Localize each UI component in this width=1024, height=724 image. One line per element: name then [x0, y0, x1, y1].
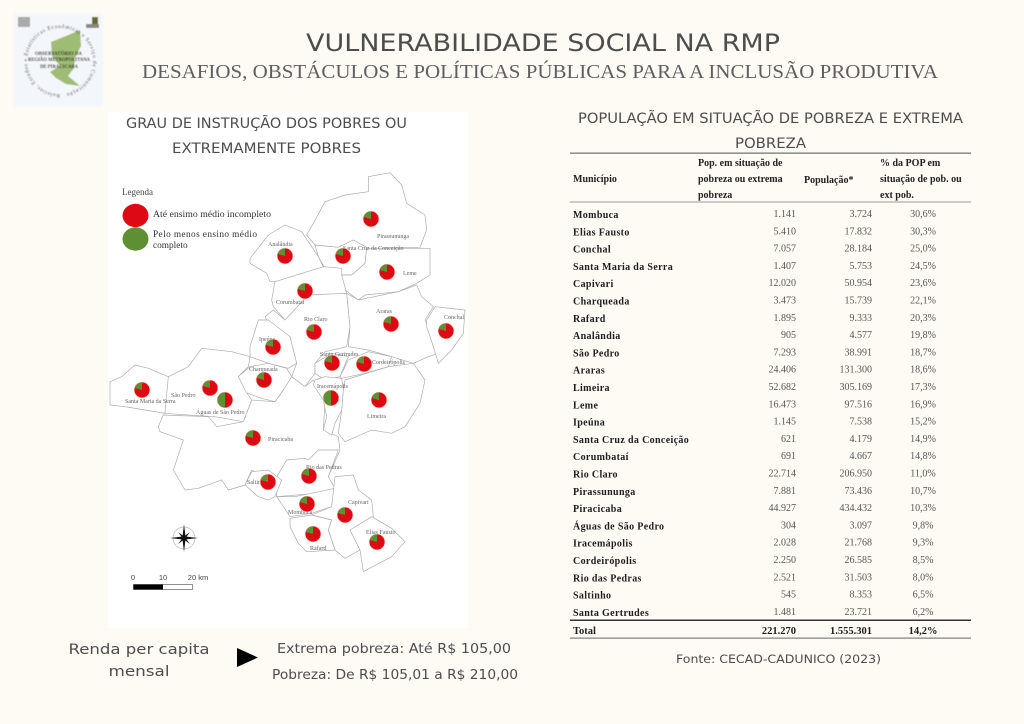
- map labels: Iracemápolis: [317, 384, 349, 390]
- table header: situação de pob. ou: [880, 174, 962, 185]
- title: VULNERABILIDADE SOCIAL NA RMP: [306, 29, 780, 57]
- table rows: 8,5%: [913, 555, 933, 566]
- table rows: 9.333: [850, 313, 872, 324]
- table rows: Mombuca: [573, 210, 619, 221]
- table rows: 20,3%: [910, 313, 936, 324]
- table rows: 304: [781, 520, 796, 531]
- table rows: 19,8%: [910, 330, 936, 341]
- legend: [122, 187, 271, 251]
- table rows: 1.141: [774, 209, 796, 220]
- panel: map of education level: [108, 112, 468, 628]
- arrow: [237, 648, 258, 667]
- source note: Fonte: CECAD-CADUNICO (2023): [676, 652, 881, 666]
- table rows: 14,8%: [910, 451, 936, 462]
- table rows: 16,9%: [910, 399, 936, 410]
- table rows: 22,1%: [910, 296, 936, 306]
- map labels: Rafard: [310, 545, 326, 552]
- table rows: 25,0%: [910, 244, 936, 255]
- logo: REGIÃO METROPOLITANA: [28, 55, 90, 63]
- heading: map: GRAU DE INSTRUÇÃO DOS POBRES OU: [126, 115, 407, 132]
- table total row: 221.270: [762, 626, 796, 637]
- table header: [573, 158, 962, 201]
- table rows: 15,2%: [910, 417, 936, 428]
- table rows: 621: [781, 434, 796, 445]
- scale bar: 20 km: [188, 573, 208, 582]
- table rows: 12.020: [768, 278, 796, 289]
- table rows: Analândia: [573, 331, 621, 342]
- map labels: Elias Fausto: [366, 530, 396, 536]
- table rows: 17.832: [844, 226, 872, 237]
- map labels: Rio das Pedras: [306, 465, 342, 471]
- map labels: Águas de São Pedro: [196, 408, 244, 416]
- table rows: [573, 209, 936, 619]
- table rows: Santa Gertrudes: [573, 608, 649, 619]
- table rows: Piracicaba: [573, 504, 622, 515]
- table rows: Santa Cruz da Conceição: [573, 435, 689, 446]
- heading: table: [578, 110, 963, 152]
- map labels: Araras: [376, 309, 393, 315]
- table rows: Araras: [573, 366, 605, 377]
- table rows: Rio Claro: [573, 470, 618, 480]
- map labels: Conchal: [444, 315, 464, 321]
- table rows: 14,9%: [910, 434, 936, 445]
- scale bar: [131, 573, 208, 590]
- table rows: 97.516: [844, 399, 872, 410]
- table rows: 434.432: [840, 503, 872, 514]
- table rows: 545: [781, 590, 796, 601]
- table total row: Total: [573, 626, 596, 637]
- map labels: Capivari: [348, 500, 369, 506]
- table rows: 2.028: [774, 538, 796, 549]
- table header: População*: [804, 175, 853, 186]
- map labels: Mombuca: [288, 510, 313, 516]
- table rows: 44.927: [768, 503, 796, 514]
- logo: [14, 14, 102, 106]
- legend: completo: [153, 241, 188, 251]
- table rows: 23,6%: [910, 278, 936, 289]
- table header: pobreza ou extrema: [698, 174, 783, 185]
- table rows: 18,7%: [910, 347, 936, 358]
- table rows: 22.714: [768, 468, 796, 480]
- table rows: 7.293: [774, 347, 796, 358]
- table rows: Charqueada: [573, 296, 630, 308]
- heading: map: [126, 115, 407, 157]
- table header: Município: [573, 174, 617, 185]
- legend: Pelo menos ensino médio: [153, 230, 257, 240]
- heading: table: POPULAÇÃO EM SITUAÇÃO DE POBREZA E EXTREMA: [578, 110, 963, 127]
- municipal boundaries: [110, 173, 465, 572]
- subtitle: DESAFIOS, OBSTÁCULOS E POLÍTICAS PÚBLICAS PARA A INCLUSÃO PRODUTIVA: [142, 59, 938, 83]
- text: income label: mensal: [108, 664, 170, 680]
- map labels: São Pedro: [171, 393, 196, 399]
- table rows: 50.954: [844, 278, 872, 289]
- logo: DE PIRACICABA: [40, 64, 78, 70]
- map labels: Piracicaba: [268, 437, 293, 443]
- table header: Pop. em situação de: [698, 158, 783, 169]
- table rows: Conchal: [573, 245, 611, 256]
- table rows: Ipeúna: [573, 418, 605, 429]
- text: income brackets: Extrema pobreza: Até R$ 105,00: [277, 641, 511, 657]
- table rows: 73.436: [844, 486, 872, 497]
- table total row: 14,2%: [909, 626, 937, 637]
- map labels: Santa Gertrudes: [320, 352, 359, 358]
- table rows: 3.473: [774, 296, 796, 306]
- table rows: Saltinho: [573, 591, 611, 602]
- text: income label: Renda per capita: [68, 642, 210, 658]
- table rows: 31.503: [844, 572, 872, 583]
- table rows: 305.169: [840, 382, 872, 393]
- table rows: 10,7%: [910, 486, 936, 497]
- table rows: 9,3%: [913, 538, 933, 549]
- table rows: Corumbataí: [573, 452, 629, 463]
- table header: pobreza: [698, 190, 732, 201]
- map labels: Charqueada: [249, 367, 278, 373]
- table rows: 30,6%: [910, 209, 936, 220]
- pie charts by municipality: [134, 211, 454, 550]
- map labels: Corumbataí: [276, 300, 305, 306]
- table rows: 24.406: [768, 365, 796, 376]
- table rows: 131.300: [840, 365, 872, 376]
- table rows: 1.895: [774, 313, 796, 324]
- map labels: Analândia: [268, 242, 293, 248]
- table rows: 2.521: [774, 572, 796, 583]
- table rows: 4.577: [850, 330, 872, 341]
- table rows: 691: [781, 451, 796, 462]
- text: income brackets: Pobreza: De R$ 105,01 a R$ 210,00: [272, 667, 518, 683]
- map labels: Rio Claro: [304, 317, 328, 323]
- table rows: 1.407: [774, 261, 796, 272]
- table rows: Iracemápolis: [573, 539, 633, 550]
- table rows: 8.353: [850, 590, 872, 601]
- table rows: 1.145: [774, 417, 796, 428]
- map labels: Santa Maria da Serra: [125, 399, 176, 405]
- map labels: Leme: [403, 271, 417, 277]
- table rows: Rio das Pedras: [573, 573, 642, 584]
- table rows: 26.585: [844, 555, 872, 566]
- table rows: 18,6%: [910, 365, 936, 376]
- table rows: Pirassununga: [573, 487, 636, 498]
- table rows: Leme: [573, 400, 598, 411]
- table rows: Cordeirópolis: [573, 556, 636, 567]
- logo: OBSERVATÓRIO DA: [35, 49, 82, 57]
- map labels: Santa Cruz da Conceição: [343, 246, 403, 252]
- map labels: Limeira: [367, 414, 386, 420]
- table rows: 17,3%: [910, 382, 936, 393]
- table rows: 7.881: [774, 486, 796, 497]
- table rows: 2.250: [774, 555, 796, 566]
- table rows: 5.410: [774, 226, 796, 237]
- text: income label: [68, 642, 210, 680]
- table rows: 38.991: [844, 347, 872, 358]
- table header: ext pob.: [880, 190, 914, 201]
- table rows: 23.721: [844, 607, 872, 618]
- table rows: 21.768: [844, 538, 872, 549]
- map labels: Ipeúna: [259, 337, 276, 343]
- table total row: [573, 626, 937, 637]
- map labels: Saltinho: [247, 480, 267, 486]
- table rows: 16.473: [768, 399, 796, 410]
- table rows: 30,3%: [910, 226, 936, 237]
- table rows: Elias Fausto: [573, 227, 630, 238]
- table rows: 52.682: [768, 382, 796, 393]
- legend: Até ensimo médio incompleto: [153, 210, 271, 220]
- table rows: 3.724: [850, 209, 872, 220]
- table rows: 206.950: [840, 468, 872, 480]
- table rows: 11,0%: [910, 468, 936, 480]
- table rows: 1.481: [774, 607, 796, 618]
- table rows: 15.739: [844, 296, 872, 306]
- legend: Legenda: [122, 187, 153, 197]
- table: poverty by municipality: [570, 152, 971, 639]
- table rows: 6,5%: [913, 590, 933, 601]
- table rows: 10,3%: [910, 503, 936, 514]
- heading: map: EXTREMAMENTE POBRES: [172, 141, 361, 157]
- table rows: 905: [781, 330, 796, 341]
- text: income brackets: [272, 641, 518, 683]
- table rows: Rafard: [573, 314, 606, 325]
- map labels: Cordeirópolis: [372, 360, 406, 366]
- logo: Boletins, Estudos e Estatísticas Econômicas e Serviço de Comunicação: [24, 24, 98, 98]
- table rows: 6,2%: [913, 607, 933, 618]
- table rows: Águas de São Pedro: [573, 520, 664, 532]
- table rows: 7.538: [850, 417, 872, 428]
- table rows: São Pedro: [573, 348, 620, 359]
- table rows: 3.097: [850, 520, 872, 531]
- map labels: [125, 234, 464, 552]
- table rows: 8,0%: [913, 572, 933, 583]
- heading: table: POBREZA: [735, 136, 806, 152]
- table rows: Limeira: [573, 383, 610, 394]
- scale bar: 0: [131, 573, 135, 582]
- map labels: Pirassununga: [377, 234, 409, 240]
- table rows: 9,8%: [913, 520, 933, 531]
- table rows: 24,5%: [910, 261, 936, 272]
- table rows: 4.179: [850, 434, 872, 445]
- scale bar: 10: [159, 573, 167, 582]
- table rows: Capivari: [573, 279, 614, 290]
- table rows: 5.753: [850, 261, 872, 272]
- table rows: Santa Maria da Serra: [573, 262, 673, 273]
- table total row: 1.555.301: [830, 626, 872, 637]
- table rows: 28.184: [844, 244, 872, 255]
- table header: % da POP em: [880, 158, 941, 169]
- table rows: 4.667: [850, 451, 872, 462]
- table rows: 7.057: [774, 244, 796, 255]
- icon: north arrow compass: [170, 524, 198, 552]
